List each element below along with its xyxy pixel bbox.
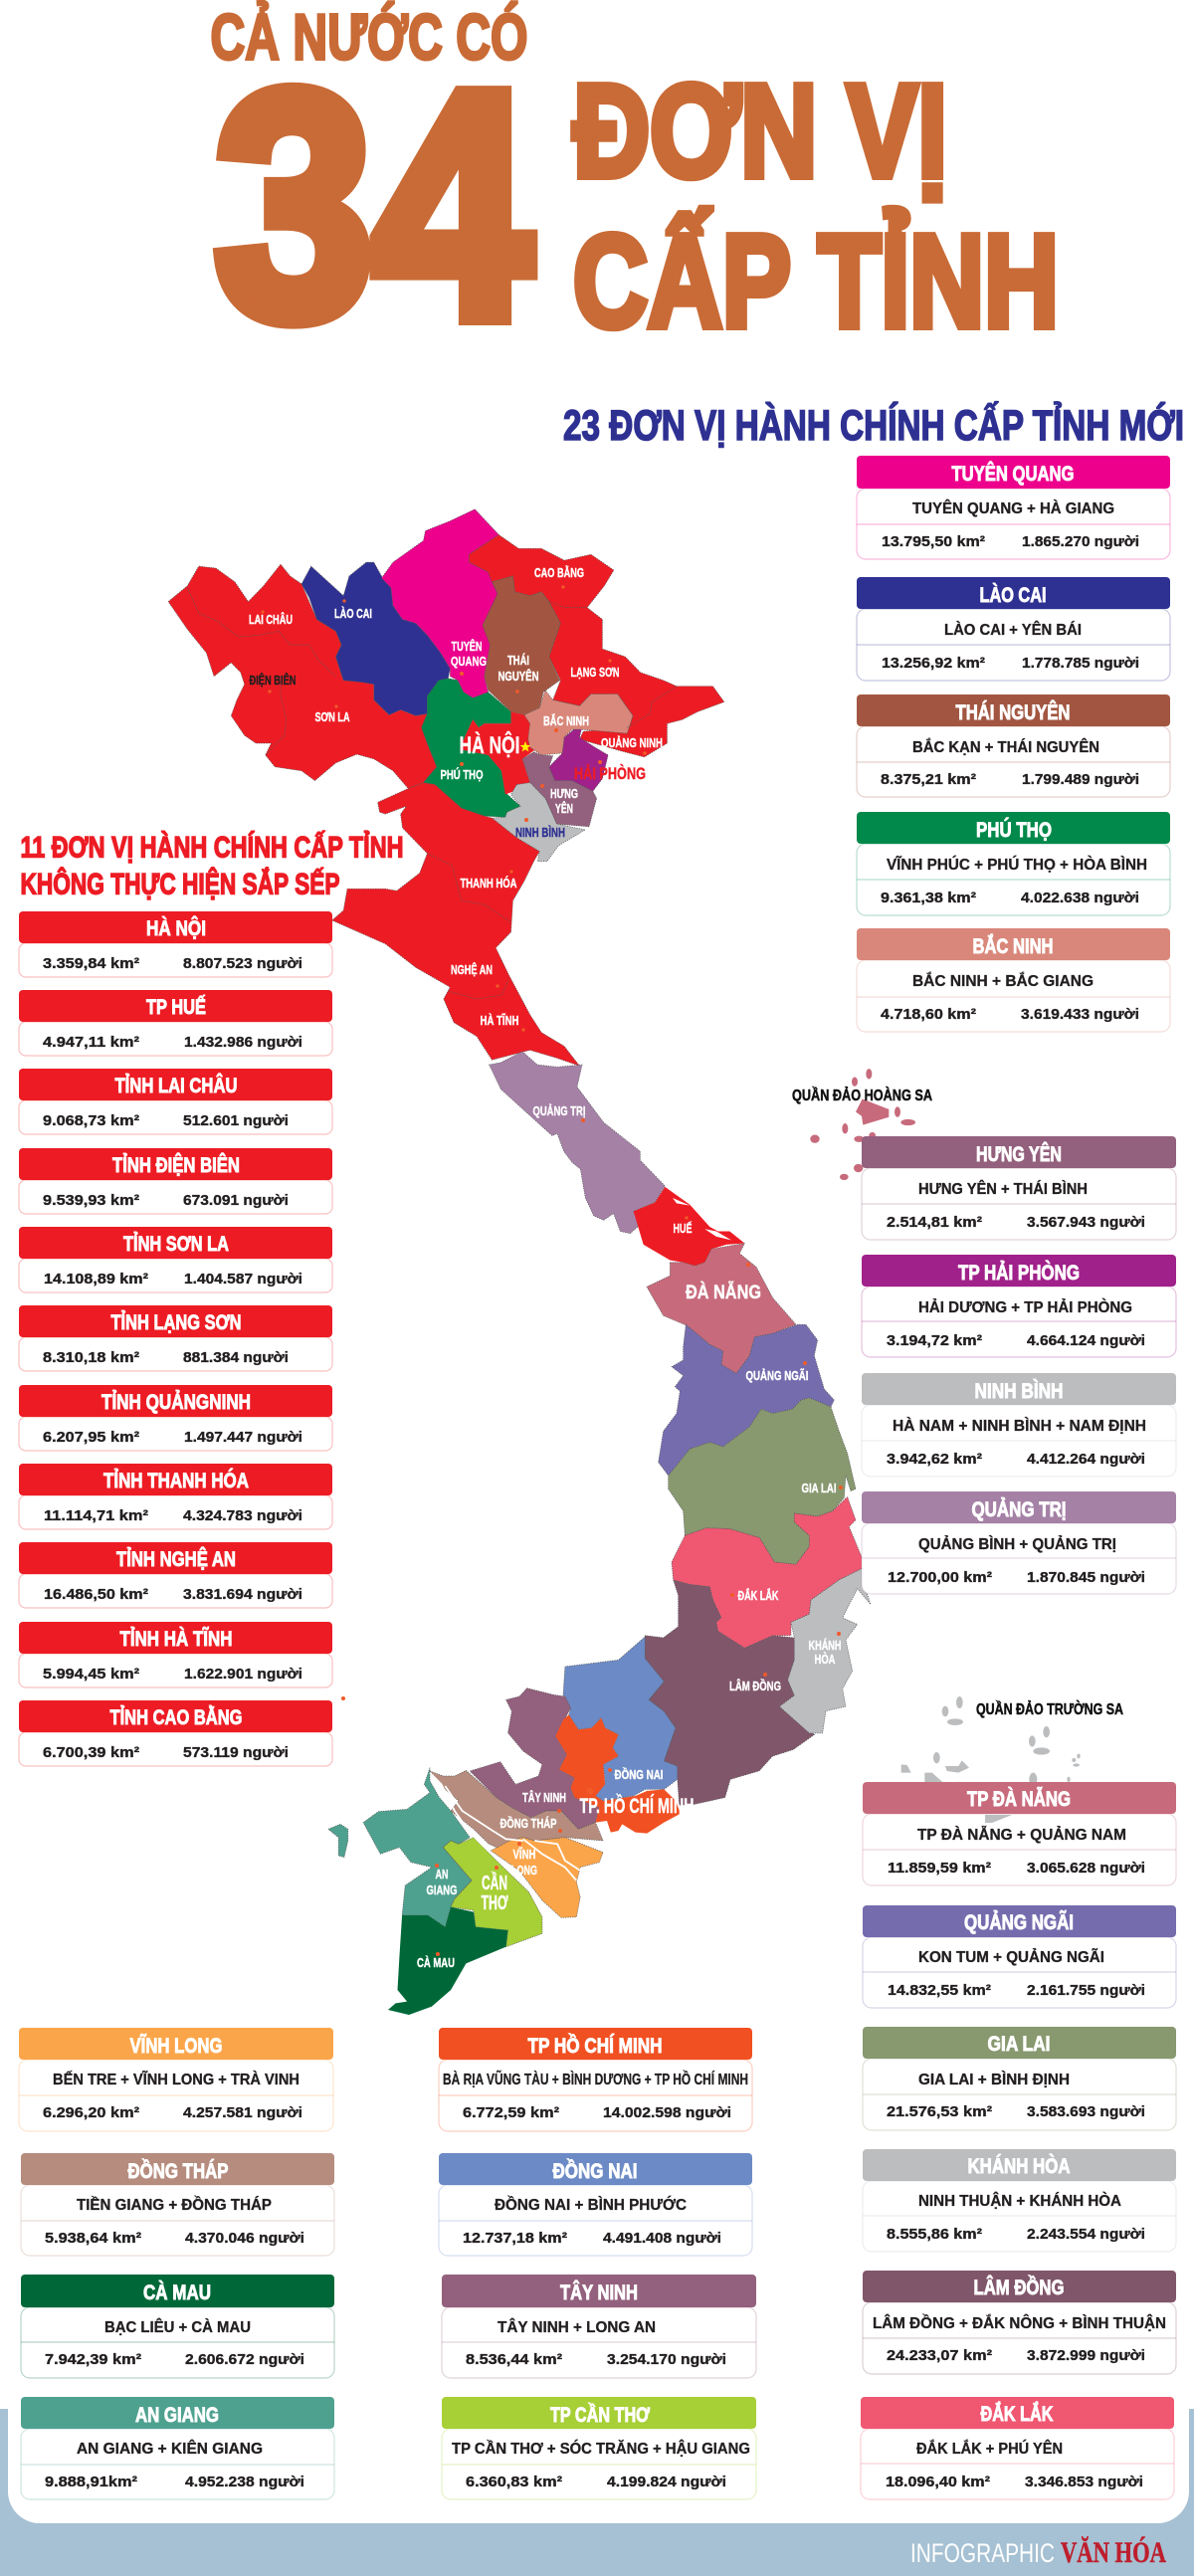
title: CẢ NƯỚC CÓ <box>211 0 527 74</box>
card: Đồng Tháp: 5.938,64 km² <box>45 2230 141 2247</box>
region: Khánh Hòa <box>779 1567 871 1733</box>
card: Cao Bằng: 6.700,39 km² <box>43 1744 139 1761</box>
card: Đắk Lắk: 18.096,40 km² <box>886 2474 990 2490</box>
Hoàng Sa islands <box>810 1069 915 1180</box>
card: Lai Châu: 512.601 người <box>183 1112 289 1129</box>
map labels: THÁI <box>507 653 529 668</box>
region: Đồng Tháp <box>430 1770 603 1851</box>
card: Lâm Đồng: 3.872.999 người <box>1027 2347 1145 2364</box>
card: Quảng Ninh <box>19 1385 332 1451</box>
map labels: LÀO CAI <box>334 606 372 621</box>
card: Thanh Hóa: TỈNH THANH HÓA <box>103 1469 249 1492</box>
card: Nghệ An: TỈNH NGHỆ AN <box>116 1547 236 1571</box>
card: Phú Thọ: 4.022.638 người <box>1021 890 1139 906</box>
region: Cà Mau <box>388 1907 507 2015</box>
card: Tuyên Quang: 13.795,50 km² <box>882 533 985 550</box>
card: Quảng Trị: 1.870.845 người <box>1027 1569 1145 1586</box>
region: Bắc Ninh <box>524 691 633 755</box>
card: Bắc Ninh: 3.619.433 người <box>1021 1006 1139 1023</box>
card: Hưng Yên <box>862 1136 1176 1240</box>
card: Quảng Trị: QUẢNG BÌNH + QUẢNG TRỊ <box>918 1536 1116 1553</box>
card: Thái Nguyên: BẮC KẠN + THÁI NGUYÊN <box>912 738 1099 756</box>
card: TP Huế: 4.947,11 km² <box>43 1034 139 1051</box>
card: Tây Ninh: TÂY NINH <box>560 2280 638 2304</box>
map labels: QUANG <box>451 654 487 669</box>
card: Tây Ninh: 8.536,44 km² <box>466 2351 562 2368</box>
card: Quảng Trị: QUẢNG TRỊ <box>971 1498 1067 1521</box>
card: Lạng Sơn: 8.310,18 km² <box>43 1349 139 1366</box>
card: Tuyên Quang: 1.865.270 người <box>1022 533 1139 550</box>
map labels: ĐÀ NẴNG <box>686 1282 761 1303</box>
map of Vietnam <box>168 509 1123 2015</box>
region: Lào Cai <box>301 562 450 715</box>
region: Lai Châu, Điện Biên, Sơn La <box>168 564 437 788</box>
card: Gia Lai <box>863 2027 1176 2130</box>
card: Khánh Hòa: 2.243.554 người <box>1027 2226 1145 2243</box>
card: Bắc Ninh: 4.718,60 km² <box>881 1006 976 1023</box>
card: Hưng Yên: 3.567.943 người <box>1027 1214 1145 1231</box>
footer band <box>0 2288 1194 2576</box>
card: TP Hồ Chí Minh: BÀ RỊA VŨNG TÀU + BÌNH DƯƠNG + TP HỒ CHÍ MINH <box>443 2071 748 2088</box>
map labels: LÂM ĐỒNG <box>729 1679 781 1693</box>
northern regions <box>168 509 724 1066</box>
map labels: QUẢNG TRỊ <box>533 1103 585 1118</box>
card: Lâm Đồng: LÂM ĐỒNG <box>973 2276 1065 2299</box>
card: Thái Nguyên: THÁI NGUYÊN <box>955 700 1071 724</box>
card: Sơn La: TỈNH SƠN LA <box>123 1233 229 1256</box>
card: Thanh Hóa <box>19 1464 332 1529</box>
card: Hà Nội: 8.807.523 người <box>183 955 302 972</box>
province capital dots <box>261 585 843 1956</box>
card: Hà Nội: HÀ NỘI <box>146 916 206 940</box>
card: Tuyên Quang: TUYÊN QUANG <box>951 462 1075 486</box>
map labels: GIANG <box>426 1882 458 1897</box>
card: Gia Lai: GIA LAI <box>987 2033 1051 2056</box>
panel: new provinces bottom columns <box>19 2028 756 2499</box>
map labels: HƯNG <box>550 786 578 801</box>
map labels: NINH BÌNH <box>515 825 565 840</box>
map labels: TP. HỒ CHÍ MINH <box>579 1794 695 1818</box>
card: Đồng Tháp: TIỀN GIANG + ĐỒNG THÁP <box>77 2196 272 2214</box>
region: Cao Bằng, Lạng Sơn, Quảng Ninh <box>469 534 724 757</box>
card: TP Huế <box>19 990 332 1056</box>
map labels: PHÚ THỌ <box>440 767 484 782</box>
card: Vĩnh Long: 6.296,20 km² <box>43 2104 139 2121</box>
card: Cao Bằng: 573.119 người <box>183 1744 289 1761</box>
panel: unchanged provinces <box>19 911 332 1766</box>
card: Sơn La <box>19 1227 332 1292</box>
map labels: HUẾ <box>673 1221 693 1236</box>
card: Đồng Nai <box>439 2153 752 2256</box>
map labels: QUẢNG NINH <box>601 735 663 750</box>
card: Nghệ An: 3.831.694 người <box>183 1586 302 1603</box>
card: TP Hồ Chí Minh <box>439 2028 752 2131</box>
card: Tây Ninh: 3.254.170 người <box>607 2351 726 2368</box>
map labels <box>249 565 842 1970</box>
card: Cà Mau: 2.606.672 người <box>185 2351 304 2368</box>
map labels: CẦN <box>482 1872 507 1894</box>
map labels: HẢI PHÒNG <box>574 764 646 783</box>
map labels: LONG <box>511 1863 537 1878</box>
card: TP Cần Thơ: 4.199.824 người <box>607 2474 726 2490</box>
card: Phú Thọ: VĨNH PHÚC + PHÚ THỌ + HÒA BÌNH <box>887 856 1147 874</box>
card: Đồng Nai: ĐỒNG NAI + BÌNH PHƯỚC <box>495 2196 687 2214</box>
region: Thanh Hóa, Nghệ An, Hà Tĩnh <box>332 783 579 1066</box>
map labels: ĐẮK LẮK <box>738 1588 779 1603</box>
card: Cao Bằng <box>19 1700 332 1766</box>
card: Đồng Nai: 12.737,18 km² <box>463 2230 567 2247</box>
card: Hưng Yên: HƯNG YÊN <box>976 1142 1062 1166</box>
card: Gia Lai: 3.583.693 người <box>1027 2103 1145 2120</box>
card: Hà Tĩnh: 1.622.901 người <box>184 1666 302 1683</box>
map labels: ĐỒNG THÁP <box>499 1816 557 1831</box>
title <box>211 0 1059 385</box>
card: Tây Ninh <box>442 2275 756 2378</box>
card: Hà Tĩnh <box>19 1622 332 1687</box>
card: TP Đà Nẵng: 11.859,59 km² <box>888 1860 991 1877</box>
card: Sơn La: 1.404.587 người <box>184 1271 302 1288</box>
card: Ninh Bình: 3.942,62 km² <box>887 1451 982 1468</box>
map labels: KHÁNH <box>808 1638 842 1653</box>
panel: new provinces right column <box>857 456 1176 2499</box>
card: Điện Biên: 9.539,93 km² <box>43 1192 139 1209</box>
map labels: BẮC NINH <box>543 713 589 728</box>
card: Lào Cai: 1.778.785 người <box>1022 655 1139 672</box>
region: Hải Phòng <box>549 729 608 791</box>
card: Quảng Ninh: TỈNH QUẢNGNINH <box>101 1391 251 1414</box>
card: Nghệ An: 16.486,50 km² <box>44 1586 148 1603</box>
card: Lào Cai: 13.256,92 km² <box>882 655 985 672</box>
region: Hà Nội <box>460 711 535 794</box>
card: Lào Cai <box>857 577 1170 681</box>
map labels: HÀ NỘI <box>460 731 519 759</box>
map labels: LAI CHÂU <box>249 612 293 627</box>
region: Tuyên Quang <box>381 509 498 698</box>
card: TP Huế: 1.432.986 người <box>184 1034 302 1051</box>
card: Ninh Bình: 4.412.264 người <box>1027 1451 1145 1468</box>
card: Phú Thọ: 9.361,38 km² <box>881 890 976 906</box>
central regions <box>490 1052 871 1805</box>
card: Tuyên Quang: TUYÊN QUANG + HÀ GIANG <box>912 499 1114 517</box>
card: Ninh Bình <box>862 1373 1176 1477</box>
heading: 11 unchanged provinces <box>20 830 404 901</box>
card: TP Cần Thơ: TP CẦN THƠ <box>550 2404 650 2427</box>
card: Cà Mau: BẠC LIÊU + CÀ MAU <box>104 2318 251 2336</box>
card: Ninh Bình: NINH BÌNH <box>975 1380 1063 1403</box>
region: Cần Thơ <box>443 1838 542 1947</box>
card: TP Cần Thơ: TP CẦN THƠ + SÓC TRĂNG + HẬU GIANG <box>452 2440 750 2458</box>
map labels: CAO BẰNG <box>534 565 584 580</box>
map labels: GIA LAI <box>802 1481 836 1495</box>
map labels: TUYÊN <box>452 639 482 654</box>
card: Quảng Ngãi: KON TUM + QUẢNG NGÃI <box>918 1948 1104 1966</box>
region: Thái Nguyên <box>483 576 560 715</box>
card: Vĩnh Long: 4.257.581 người <box>183 2104 302 2121</box>
card: Lai Châu <box>19 1069 332 1134</box>
title: 34 <box>215 25 533 385</box>
card: Quảng Ninh: 1.497.447 người <box>184 1429 302 1446</box>
card: Đắk Lắk <box>861 2397 1174 2499</box>
card: Lạng Sơn <box>19 1305 332 1371</box>
card: Gia Lai: 21.576,53 km² <box>887 2103 992 2120</box>
card: Đắk Lắk: ĐẮK LẮK <box>981 2402 1053 2426</box>
card: Đồng Tháp: 4.370.046 người <box>185 2230 304 2247</box>
label: Hoàng Sa: QUẦN ĐẢO HOÀNG SA <box>792 1086 932 1104</box>
map labels: CÀ MAU <box>417 1955 455 1970</box>
map labels: ĐỒNG NAI <box>615 1767 663 1782</box>
card: Khánh Hòa: KHÁNH HÒA <box>967 2154 1071 2178</box>
card: Gia Lai: GIA LAI + BÌNH ĐỊNH <box>918 2072 1070 2088</box>
card: An Giang <box>21 2397 334 2499</box>
card: TP Hồ Chí Minh: 14.002.598 người <box>603 2104 731 2121</box>
card: Bắc Ninh: BẮC NINH + BẮC GIANG <box>912 972 1094 990</box>
heading: 11 unchanged provinces: 11 ĐƠN VỊ HÀNH CHÍNH CẤP TỈNH <box>20 830 404 864</box>
southern regions <box>328 1637 680 2015</box>
card: Quảng Ngãi <box>863 1905 1176 2008</box>
card: Tuyên Quang <box>857 456 1170 559</box>
region: Huế <box>634 1187 744 1266</box>
icon: capital star <box>519 741 531 752</box>
card: Ninh Bình: HÀ NAM + NINH BÌNH + NAM ĐỊNH <box>893 1418 1146 1435</box>
card: Vĩnh Long: VĨNH LONG <box>129 2035 223 2058</box>
island showing through Đà Nẵng card <box>985 1815 1012 1823</box>
card: Đồng Tháp <box>21 2153 334 2256</box>
title: ĐƠN VỊ <box>573 58 947 204</box>
card: Lâm Đồng: 24.233,07 km² <box>887 2347 992 2364</box>
region: Hưng Yên <box>522 752 597 827</box>
map labels: HÒA <box>814 1652 836 1667</box>
card: TP Đà Nẵng <box>863 1782 1176 1885</box>
brand: Infographic Văn Hóa <box>910 2536 1166 2569</box>
region: Gia Lai <box>669 1398 856 1564</box>
card: TP Đà Nẵng: 3.065.628 người <box>1027 1860 1145 1877</box>
card: Vĩnh Long <box>19 2028 333 2131</box>
card: Lạng Sơn: 881.384 người <box>183 1349 289 1366</box>
map labels: ĐIỆN BIÊN <box>249 673 297 688</box>
card: Cà Mau <box>21 2275 334 2378</box>
card: Khánh Hòa <box>863 2149 1176 2252</box>
card: Cà Mau: 7.942,39 km² <box>45 2351 141 2368</box>
Trường Sa islands <box>901 1696 1081 1786</box>
card: TP Hải Phòng: 4.664.124 người <box>1027 1332 1145 1349</box>
region: Đà Nẵng <box>647 1244 796 1373</box>
card: Lâm Đồng <box>863 2271 1176 2374</box>
card: Đắk Lắk: 3.346.853 người <box>1025 2474 1143 2490</box>
map labels: YÊN <box>555 801 573 816</box>
region: Ninh Bình <box>492 783 585 862</box>
card: Quảng Ngãi: QUẢNG NGÃI <box>964 1911 1074 1934</box>
region: Lâm Đồng <box>645 1580 815 1805</box>
card: Vĩnh Long: BẾN TRE + VĨNH LONG + TRÀ VINH <box>53 2071 299 2088</box>
card: Lào Cai: LÀO CAI + YÊN BÁI <box>944 621 1082 639</box>
card: Thái Nguyên <box>857 694 1170 797</box>
card: Khánh Hòa: 8.555,86 km² <box>887 2226 982 2243</box>
card: An Giang: AN GIANG <box>135 2404 219 2427</box>
card: Quảng Ngãi: 14.832,55 km² <box>888 1982 991 1999</box>
card: Hưng Yên: HƯNG YÊN + THÁI BÌNH <box>918 1180 1088 1198</box>
card: TP Hồ Chí Minh: 6.772,59 km² <box>463 2104 559 2121</box>
card: Tây Ninh: TÂY NINH + LONG AN <box>498 2318 656 2336</box>
card: Hà Nội: 3.359,84 km² <box>43 955 139 972</box>
map labels: THANH HÓA <box>460 876 517 891</box>
map labels: NGUYÊN <box>498 669 539 684</box>
card: TP Hải Phòng <box>862 1255 1176 1357</box>
card: Thanh Hóa: 11.114,71 km² <box>44 1507 148 1524</box>
card: Thanh Hóa: 4.324.783 người <box>183 1507 302 1524</box>
map labels: TÂY NINH <box>522 1790 566 1805</box>
card: TP Hải Phòng: HẢI DƯƠNG + TP HẢI PHÒNG <box>918 1298 1132 1316</box>
region: TP Hồ Chí Minh <box>555 1714 680 1834</box>
card: Lâm Đồng: LÂM ĐỒNG + ĐẮK NÔNG + BÌNH THUẬN <box>873 2314 1166 2332</box>
card: Thái Nguyên: 1.799.489 người <box>1022 771 1139 788</box>
card: Đồng Nai: ĐỒNG NAI <box>553 2159 637 2183</box>
card: Quảng Ngãi: 2.161.755 người <box>1027 1982 1145 1999</box>
label: Trường Sa: QUẦN ĐẢO TRƯỜNG SA <box>976 1699 1123 1718</box>
card: Khánh Hòa: NINH THUẬN + KHÁNH HÒA <box>918 2192 1121 2210</box>
card: An Giang: 4.952.238 người <box>185 2474 304 2490</box>
card: TP Cần Thơ: 6.360,83 km² <box>466 2474 562 2490</box>
card: Đắk Lắk: ĐẮK LẮK + PHÚ YÊN <box>916 2440 1063 2458</box>
card: Hà Tĩnh: 5.994,45 km² <box>43 1666 139 1683</box>
card: TP Hải Phòng: 3.194,72 km² <box>887 1332 982 1349</box>
card: Phú Thọ <box>857 812 1170 915</box>
card: Lai Châu: 9.068,73 km² <box>43 1112 139 1129</box>
map labels: NGHỆ AN <box>451 962 493 977</box>
card: Nghệ An <box>19 1542 332 1608</box>
map labels: QUẢNG NGÃI <box>746 1368 808 1383</box>
card: Hà Tĩnh: TỈNH HÀ TĨNH <box>119 1628 233 1651</box>
card: Lạng Sơn: TỈNH LẠNG SƠN <box>111 1311 241 1334</box>
card: Quảng Ninh: 6.207,95 km² <box>43 1429 139 1446</box>
map labels: AN <box>436 1867 448 1882</box>
card: Đồng Tháp: ĐỒNG THÁP <box>127 2159 229 2183</box>
brand: Infographic Văn Hóa: INFOGRAPHIC <box>910 2538 1055 2568</box>
map labels: HÀ TĨNH <box>480 1013 519 1028</box>
card: Cao Bằng: TỈNH CAO BẰNG <box>109 1705 243 1729</box>
card: Hà Nội <box>19 911 332 977</box>
card: Cà Mau: CÀ MAU <box>143 2281 211 2304</box>
card: Lào Cai: LÀO CAI <box>979 584 1047 607</box>
map labels: VĨNH <box>513 1847 535 1862</box>
card: An Giang: AN GIANG + KIÊN GIANG <box>77 2440 263 2458</box>
region: Phú Thọ <box>422 679 520 817</box>
region: Quảng Ngãi <box>659 1324 834 1476</box>
card: Điện Biên: TỈNH ĐIỆN BIÊN <box>112 1153 240 1177</box>
card: Phú Thọ: PHÚ THỌ <box>976 818 1052 842</box>
card: TP Đà Nẵng: TP ĐÀ NẴNG + QUẢNG NAM <box>917 1827 1126 1844</box>
region: Đắk Lắk <box>672 1496 866 1648</box>
card: Thái Nguyên: 8.375,21 km² <box>881 771 976 788</box>
title: CẤP TỈNH <box>573 208 1059 354</box>
card: Lai Châu: TỈNH LAI CHÂU <box>115 1074 237 1097</box>
region: Vĩnh Long <box>491 1838 603 1917</box>
heading: 11 unchanged provinces: KHÔNG THỰC HIỆN SẮP SẾP <box>20 868 340 901</box>
region: Tây Ninh <box>470 1688 599 1829</box>
card: Quảng Trị: 12.700,00 km² <box>888 1569 992 1586</box>
map labels: SƠN LA <box>314 709 350 724</box>
card: Quảng Trị <box>862 1491 1176 1594</box>
card: Bắc Ninh: BẮC NINH <box>973 934 1053 958</box>
region: Quảng Trị <box>490 1052 665 1234</box>
map labels: LẠNG SƠN <box>571 665 619 680</box>
card: TP Hồ Chí Minh: TP HỒ CHÍ MINH <box>527 2034 663 2058</box>
card: Sơn La: 14.108,89 km² <box>44 1271 148 1288</box>
card: TP Huế: TP HUẾ <box>146 996 206 1019</box>
region: Đồng Nai <box>563 1637 678 1801</box>
card: Hưng Yên: 2.514,81 km² <box>887 1214 982 1231</box>
card: Điện Biên <box>19 1148 332 1214</box>
card: TP Cần Thơ <box>442 2397 756 2499</box>
map labels: THƠ <box>482 1892 508 1914</box>
card: Điện Biên: 673.091 người <box>183 1192 289 1209</box>
card: TP Đà Nẵng: TP ĐÀ NẴNG <box>967 1788 1071 1811</box>
card: An Giang: 9.888,91km² <box>45 2474 137 2490</box>
card: TP Hải Phòng: TP HẢI PHÒNG <box>958 1261 1080 1285</box>
card: Bắc Ninh <box>857 928 1170 1032</box>
card: Đồng Nai: 4.491.408 người <box>603 2230 721 2247</box>
region: An Giang <box>328 1768 472 1927</box>
